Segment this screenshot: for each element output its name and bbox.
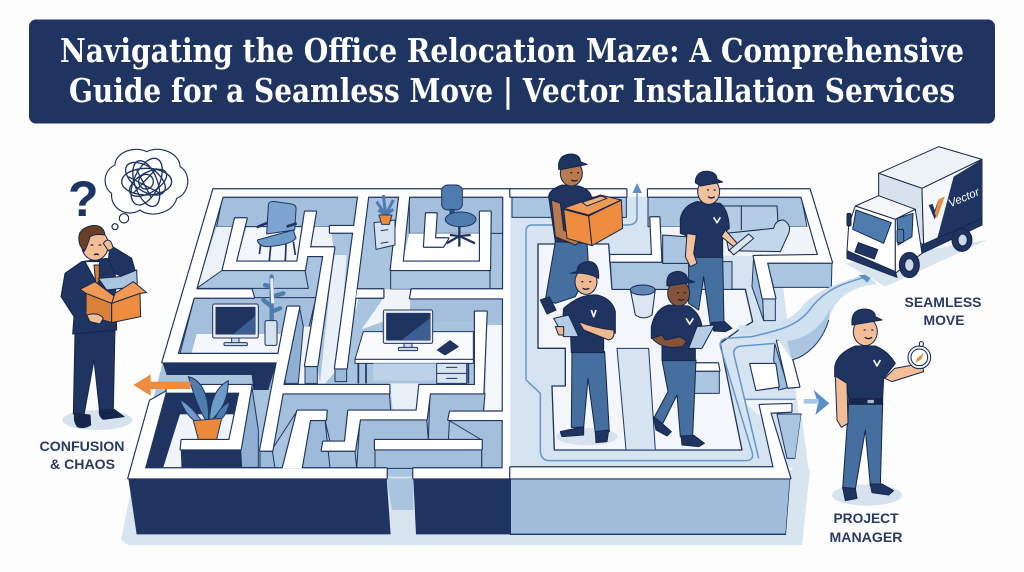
arrow: to truck — [859, 274, 873, 283]
icon: bucket — [630, 285, 655, 318]
cardboard box — [80, 270, 147, 323]
floating panel carried by worker — [663, 235, 709, 263]
icon: stopwatch compass — [908, 342, 931, 369]
worker with box — [540, 154, 623, 314]
office furniture and plants — [180, 185, 476, 439]
icon: desk with monitor, book and drawers — [355, 310, 473, 383]
project manager with stopwatch — [832, 309, 931, 506]
label: seamless move: SEAMLESS — [904, 294, 982, 310]
legs — [73, 327, 115, 415]
worker standing with blueprint — [680, 171, 754, 332]
icon: cabinet with plant — [374, 195, 395, 249]
confused office worker — [61, 149, 188, 430]
label: project manager: PROJECT — [834, 510, 899, 526]
worker with tablet, blue pose — [556, 352, 618, 445]
cardboard box carried — [564, 195, 621, 215]
icon: monitor on small desk — [213, 304, 258, 346]
delivery truck — [845, 147, 987, 287]
icon: blue armchair — [257, 202, 297, 261]
truck brand name: Vector — [947, 186, 982, 210]
icon: swivel office chair — [442, 185, 476, 247]
label: confusion & chaos: CONFUSION — [40, 438, 124, 454]
workers and project manager — [540, 154, 931, 506]
label: seamless move — [904, 294, 982, 328]
arrow: exit up — [632, 183, 642, 193]
suit jacket — [61, 258, 117, 334]
label: seamless move: MOVE — [924, 312, 964, 328]
route line through the maze — [526, 193, 866, 461]
label: confusion & chaos — [40, 438, 124, 472]
maze ground shadow — [121, 470, 810, 545]
title banner — [29, 20, 995, 124]
question mark: ? — [68, 171, 99, 227]
label: project manager — [830, 510, 902, 545]
arrow: to project manager — [804, 390, 829, 415]
worker with tablet, upper body — [554, 262, 615, 353]
figure shadow — [62, 410, 132, 430]
worker walking with tablet — [651, 271, 715, 447]
thought bubble with scribble — [105, 149, 188, 230]
label: project manager: MANAGER — [830, 529, 902, 545]
icon: potted plant at the dead end — [180, 377, 230, 439]
arrow: orange dead-end arrow — [133, 374, 191, 396]
maze right half: organised side — [510, 189, 877, 545]
maze left half: confused side — [128, 189, 513, 534]
icon: sofa — [722, 206, 790, 252]
head — [82, 230, 108, 260]
curved ribbon path to truck — [739, 274, 877, 360]
icon: tall plant in vase — [263, 277, 283, 345]
truck logo V — [929, 197, 945, 219]
label: confusion & chaos: & CHAOS — [50, 456, 115, 472]
